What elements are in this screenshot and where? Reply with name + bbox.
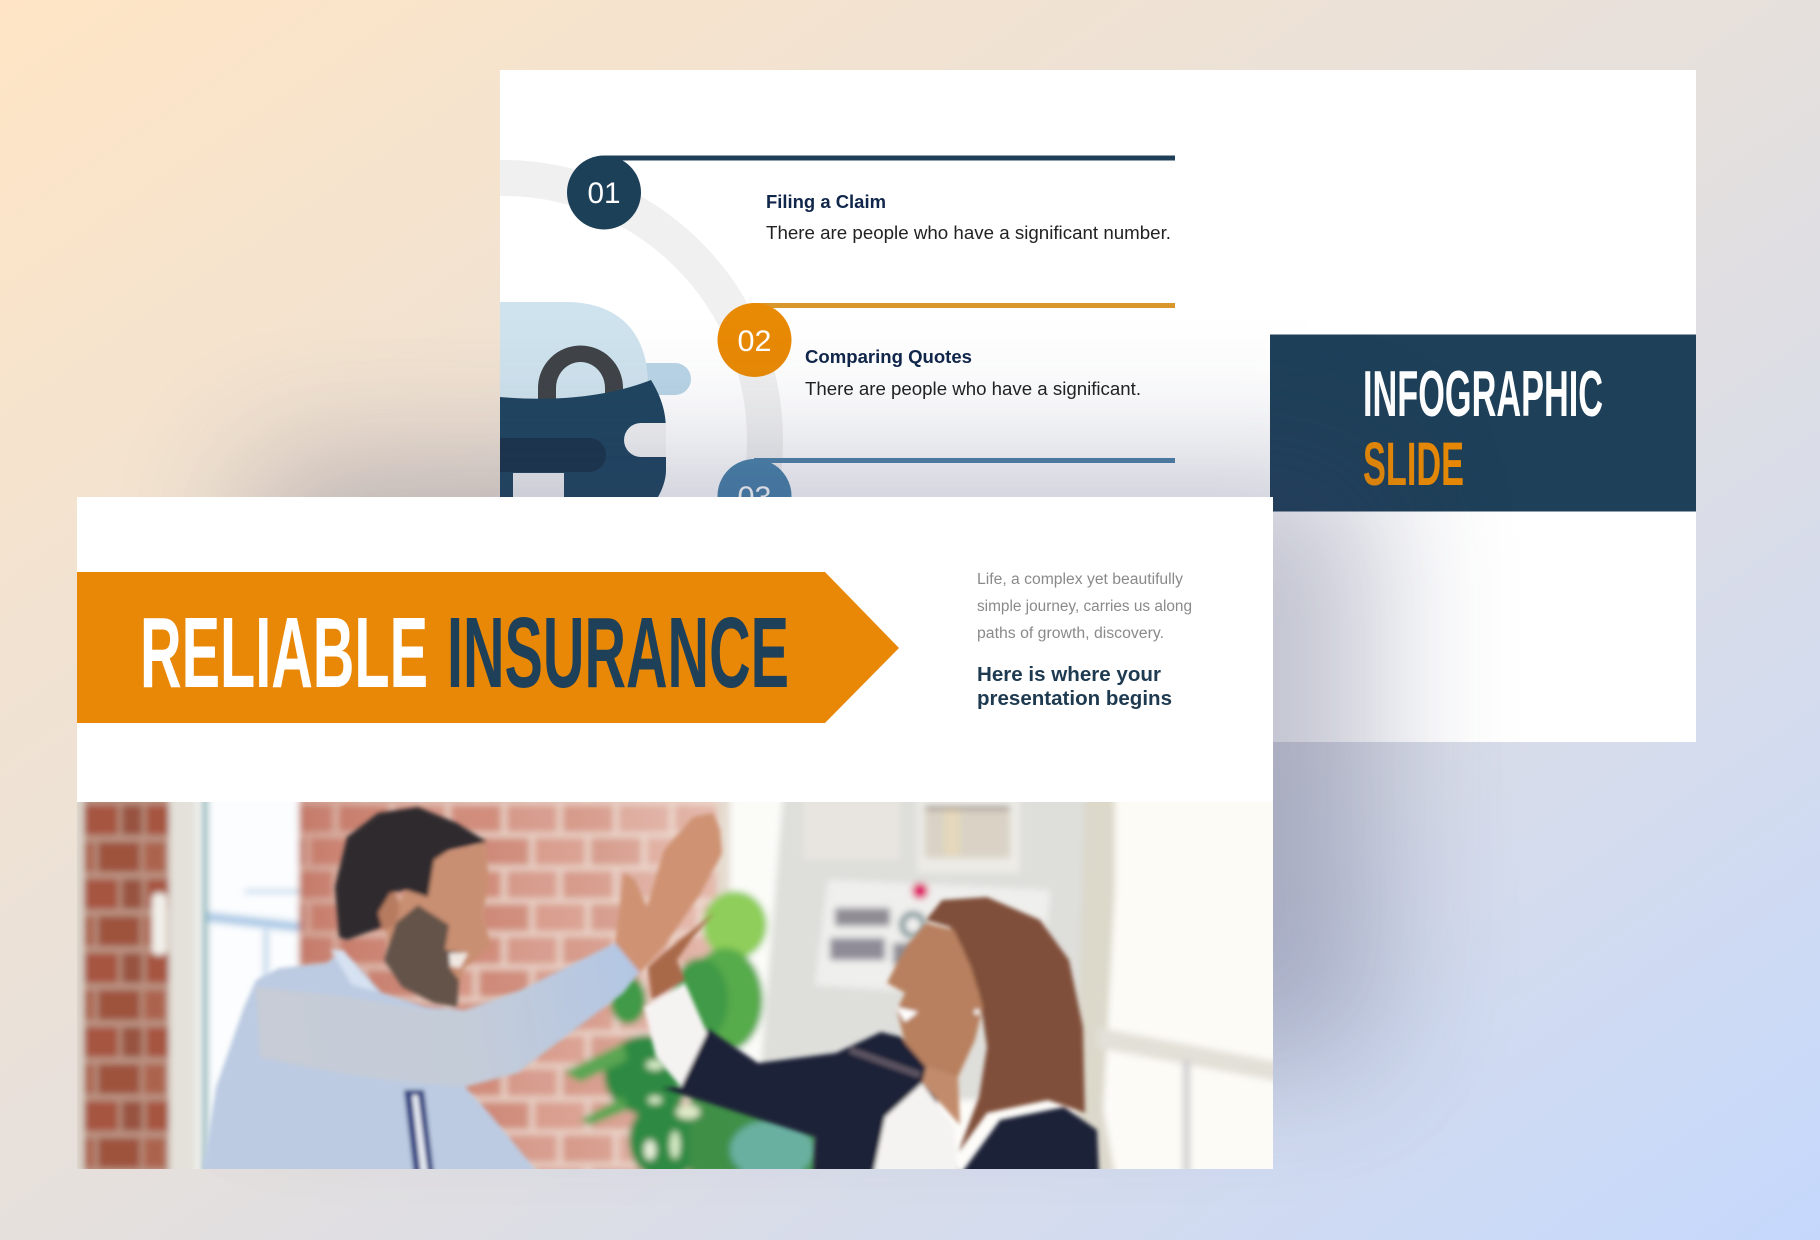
step 02: There are people who have a significant. <box>805 379 1141 399</box>
banner arrow with title <box>77 572 899 723</box>
step 03 <box>718 458 1175 533</box>
man <box>202 807 722 1175</box>
intro text block <box>977 571 1192 710</box>
step 01: Filing a Claim <box>766 192 886 212</box>
panel: front slide, reliable insurance <box>77 497 1273 1169</box>
step 02: Comparing Quotes <box>805 347 972 367</box>
plant <box>564 891 820 1180</box>
intro text block: Life, a complex yet beautifully <box>977 571 1183 588</box>
step 01: 01 <box>588 177 620 210</box>
panel: infographic slide title box: SLIDE <box>1363 430 1464 498</box>
panel: infographic slide title box <box>1270 334 1696 512</box>
woman <box>644 897 1099 1175</box>
icon: car front <box>500 302 691 503</box>
banner arrow with title: INSURANCE <box>447 597 789 709</box>
step 02: 02 <box>738 325 772 358</box>
panel: back slide, infographic steps <box>500 70 1696 742</box>
step 03: 03 <box>738 481 772 514</box>
step 02 <box>718 303 1175 399</box>
intro text block: presentation begins <box>977 687 1172 710</box>
grey curved path ring <box>241 178 765 702</box>
intro text block: paths of growth, discovery. <box>977 625 1164 642</box>
banner arrow with title: RELIABLE <box>140 597 428 709</box>
step 01 <box>567 156 1175 243</box>
intro text block: simple journey, carries us along <box>977 598 1192 615</box>
intro text block: Here is where your <box>977 663 1161 686</box>
step 01: There are people who have a significant number. <box>766 223 1171 243</box>
photo: colleagues high five <box>77 802 1273 1169</box>
